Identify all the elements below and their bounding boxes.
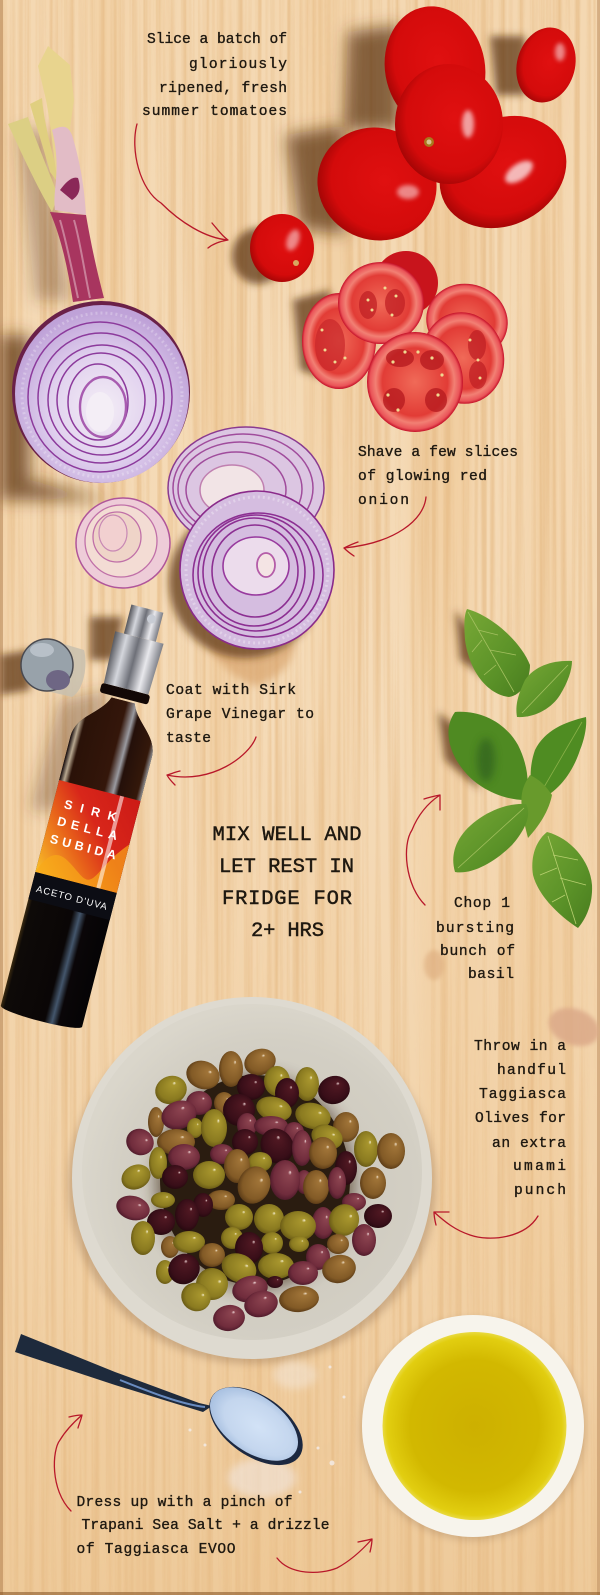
olive oil (382, 1332, 566, 1520)
leaf 3 (448, 712, 528, 800)
caption: tomatoes: summer tomatoes (142, 104, 287, 120)
bottle body (0, 690, 164, 1032)
mix well heading: FRIDGE FOR (222, 888, 352, 911)
salt scatter (188, 1361, 346, 1498)
caption: olives: Throw in a (474, 1039, 566, 1055)
leaf 1 (464, 609, 530, 697)
black label: ACETO D'UVA (35, 884, 109, 913)
caption: basil: basil (468, 967, 514, 983)
object shadows (0, 25, 525, 810)
leaf 6 (532, 832, 592, 928)
shaker cap (21, 639, 86, 697)
caption: basil: bursting (436, 921, 514, 937)
black collar (99, 683, 150, 705)
mix well heading (212, 824, 362, 943)
onion slice: back (168, 427, 324, 549)
olives (113, 1044, 405, 1334)
caption: olives: Taggiasca (479, 1087, 566, 1103)
slice: right lower (413, 304, 513, 412)
caption: salt and oil: of Taggiasca EVOO (76, 1542, 236, 1558)
tomato: top (375, 0, 495, 138)
tomatoes: whole group (250, 0, 586, 282)
mix well heading: 2+ HRS (251, 920, 324, 943)
caption: onion: onion (358, 493, 409, 509)
tomato: small front (250, 214, 314, 282)
slice: right upper (418, 275, 516, 367)
caption: vinegar (166, 683, 314, 747)
mix well heading: LET REST IN (219, 856, 354, 879)
spoon bowl (195, 1371, 317, 1481)
onion half (12, 301, 190, 483)
olive oil bowl (361, 1315, 585, 1540)
red label: DELLA (56, 814, 124, 844)
sprout (521, 775, 552, 838)
caption: onion: Shave a few slices (358, 445, 518, 461)
caption: olives (474, 1039, 566, 1199)
leaf 4 (531, 717, 586, 800)
arrow: olives (434, 1212, 538, 1238)
caption: tomatoes (142, 32, 287, 120)
tomato slices (302, 251, 516, 432)
tomato: small right (508, 21, 584, 109)
tomato: center (395, 64, 503, 184)
slice: front (367, 332, 463, 432)
mix well heading: MIX WELL AND (212, 824, 362, 847)
caption: vinegar: taste (166, 731, 211, 747)
arrow: spoon (54, 1415, 82, 1511)
caption: olives: umami (513, 1159, 566, 1175)
caption: tomatoes: gloriously (189, 57, 287, 73)
leaf 2 (516, 661, 572, 717)
caption: olives: Olives for (475, 1111, 566, 1127)
caption: onion: of glowing red (358, 469, 487, 485)
arrow: basil (406, 795, 440, 905)
black label (28, 872, 117, 920)
arrow: oil (277, 1539, 372, 1572)
caption: olives: an extra (492, 1136, 566, 1152)
salt (197, 1372, 311, 1476)
red label (29, 780, 141, 919)
onion stem (8, 46, 104, 302)
caption: salt and oil: Trapani Sea Salt + a drizzle (82, 1518, 330, 1534)
red label: SIRK (63, 797, 126, 826)
spray head (124, 604, 163, 642)
caption: olives: handful (497, 1063, 566, 1079)
caption: olives: punch (514, 1183, 566, 1199)
basil leaves (448, 609, 592, 928)
salt spoon (15, 1334, 317, 1481)
bottle shoulder glass (59, 690, 164, 803)
caption: basil: bunch of (440, 944, 515, 960)
caption: onion (358, 445, 518, 509)
slice: top (338, 262, 424, 344)
slice: left seeds (320, 328, 346, 364)
caption: salt and oil (76, 1495, 330, 1558)
silver collar (102, 631, 164, 695)
leaf 5 (453, 804, 528, 872)
arrow: tomatoes (135, 124, 228, 248)
caption: vinegar: Coat with Sirk (166, 683, 296, 699)
caption: vinegar: Grape Vinegar to (166, 707, 314, 723)
wood knots (205, 640, 600, 1053)
slice: back (374, 251, 438, 315)
slice: left (302, 293, 376, 389)
red label: SUBIDA (48, 832, 122, 863)
arrow: onion (344, 497, 426, 556)
onion slice: front (180, 491, 334, 649)
caption: salt and oil: Dress up with a pinch of (76, 1495, 292, 1511)
spoon handle (15, 1334, 212, 1412)
caption: tomatoes: ripened, fresh (159, 81, 287, 97)
caption: basil (436, 896, 515, 983)
tomato: left (301, 111, 453, 257)
vinegar bottle (0, 598, 188, 1032)
caption: tomatoes: Slice a batch of (147, 32, 287, 48)
onion slice: small (76, 498, 170, 588)
olive bowl (68, 997, 436, 1364)
arrow: vinegar (167, 737, 256, 785)
tomato: right (420, 94, 586, 250)
caption: basil: Chop 1 (454, 896, 510, 912)
